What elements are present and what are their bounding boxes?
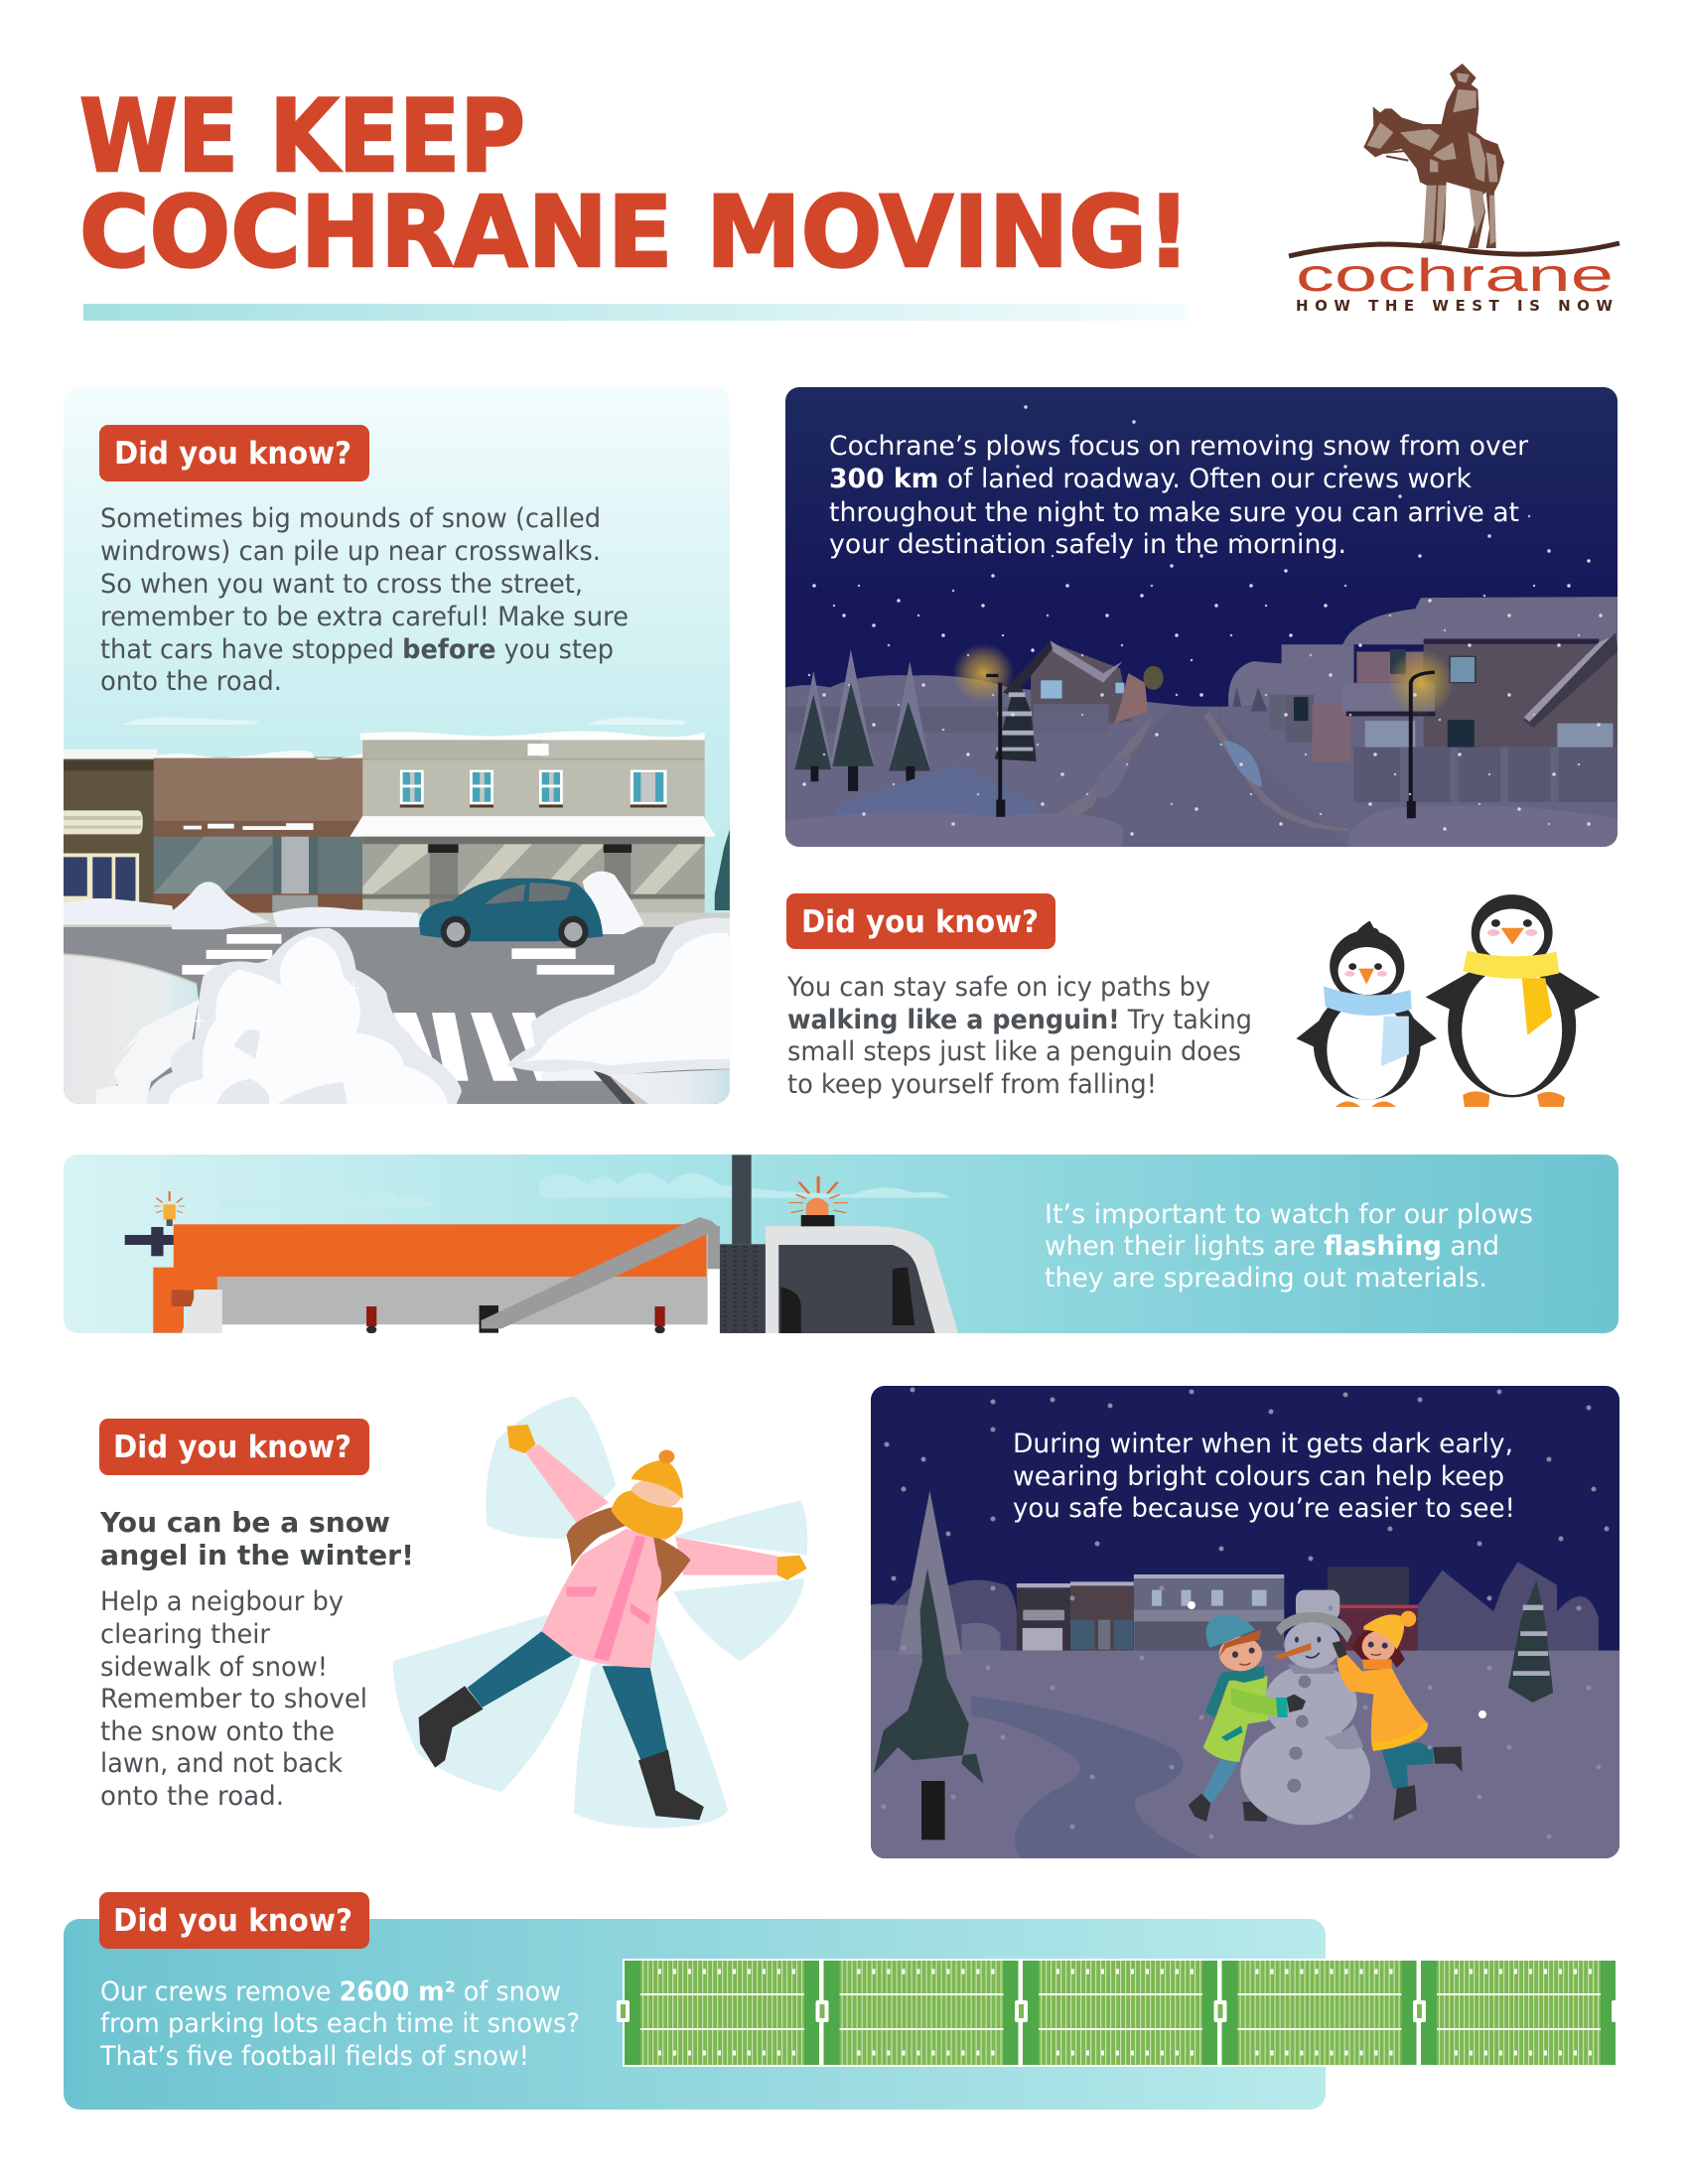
body text: It’s important to watch for our plows — [1045, 1199, 1533, 1230]
small penguin — [1297, 921, 1437, 1107]
illustration: kids building a snowman — [870, 1390, 1619, 1859]
boy legs and boots — [1203, 1760, 1238, 1804]
road — [971, 1696, 1200, 1858]
logo: Cochrane rider and wordmark — [1289, 64, 1619, 315]
body text: onto the road. — [100, 1781, 284, 1812]
body text: to keep yourself from falling! — [787, 1069, 1157, 1100]
trees — [794, 671, 833, 768]
boy sleeve, mitten, scarf, head — [1231, 1688, 1278, 1715]
body text: During winter when it gets dark early, — [1013, 1429, 1513, 1459]
body text: clearing their — [100, 1619, 270, 1650]
big penguin — [1426, 894, 1600, 1107]
title: WE KEEP — [79, 77, 525, 195]
heading — [99, 1506, 414, 1571]
body text: Sometimes big mounds of snow (called — [100, 503, 601, 534]
snow mounds — [64, 917, 739, 1104]
girl — [1333, 1611, 1463, 1821]
body text: windrows) can pile up near crosswalks. — [100, 536, 601, 567]
body text: Cochrane’s plows focus on removing snow from over — [829, 431, 1528, 462]
car — [419, 879, 603, 947]
right tree — [1508, 1580, 1553, 1703]
illustration: snowy neighbourhood at night — [785, 407, 1618, 848]
body text: the snow onto the — [100, 1716, 335, 1747]
left hair — [567, 1507, 626, 1567]
arms — [524, 1444, 778, 1575]
kids and snowman — [1189, 1590, 1463, 1825]
panel: windrows at crosswalks — [64, 387, 739, 1106]
body text: that cars have stopped before you step — [100, 634, 614, 665]
body text — [786, 972, 1252, 1100]
panel: walk like a penguin — [786, 893, 1600, 1107]
title: COCHRANE MOVING! — [79, 176, 1191, 290]
body text — [100, 1586, 367, 1812]
panel background — [64, 1155, 1618, 1333]
boy coat — [1203, 1676, 1269, 1762]
swoosh — [1289, 243, 1619, 256]
body text: you safe because you’re easier to see! — [1013, 1493, 1515, 1524]
body text: remember to be extra careful! Make sure — [100, 602, 629, 632]
body text — [829, 431, 1528, 560]
panel background — [64, 1919, 1326, 2110]
panel: night plowing — [785, 387, 1618, 848]
head, scarf and hat — [630, 1478, 681, 1510]
badge: Did you know? — [113, 1430, 352, 1465]
ground — [870, 1651, 1619, 1859]
body text: they are spreading out materials. — [1045, 1263, 1487, 1294]
title — [79, 77, 1191, 290]
body text: 300 km of laned roadway. Often our crews work — [829, 464, 1473, 494]
badge — [99, 1419, 369, 1475]
body text: from parking lots each time it snows? — [100, 2008, 580, 2039]
background tree line — [870, 1562, 1599, 1651]
body text: onto the road. — [100, 666, 282, 697]
right hair — [653, 1536, 690, 1601]
legs — [468, 1631, 668, 1760]
badge — [99, 425, 369, 481]
body text: wearing bright colours can help keep — [1013, 1461, 1504, 1492]
road — [1192, 707, 1220, 847]
shops — [1017, 1585, 1070, 1651]
heading: angel in the winter! — [100, 1539, 414, 1571]
body text: your destination safely in the morning. — [829, 529, 1346, 560]
street lamps — [954, 645, 1013, 701]
badge: Did you know? — [113, 1903, 352, 1939]
body text: Help a neigbour by — [100, 1586, 344, 1617]
snow angel imprint — [393, 1397, 807, 1829]
left tree — [898, 1491, 961, 1655]
coat — [542, 1529, 665, 1668]
body text: Remember to shovel — [100, 1684, 367, 1714]
body text — [1045, 1199, 1533, 1294]
heading: You can be a snow — [99, 1506, 390, 1539]
right houses — [1228, 644, 1354, 707]
body text: when their lights are flashing and — [1045, 1231, 1499, 1262]
badge: Did you know? — [801, 904, 1039, 940]
panel: five football fields — [64, 1892, 1621, 2110]
body text — [100, 503, 629, 697]
body text: So when you want to cross the street, — [100, 569, 583, 600]
panel: watch for plows — [64, 1155, 1618, 1333]
body text: You can stay safe on icy paths by — [786, 972, 1210, 1003]
body text: That’s five football fields of snow! — [99, 2041, 529, 2072]
panel background — [871, 1386, 1619, 1858]
falling snow — [804, 407, 1601, 834]
body text: small steps just like a penguin does — [787, 1036, 1241, 1067]
body text — [1013, 1429, 1515, 1524]
body text — [99, 1977, 580, 2072]
falling snow — [884, 1390, 1607, 1837]
panel: snow angel — [99, 1397, 807, 1829]
wordmark: cochrane — [1296, 249, 1614, 301]
badge — [786, 893, 1055, 949]
body text: sidewalk of snow! — [100, 1652, 328, 1683]
illustration: girl making a snow angel — [393, 1397, 807, 1829]
tagline: HOW THE WEST IS NOW — [1296, 297, 1613, 315]
icon: two penguins with scarves — [1297, 894, 1600, 1107]
panel background — [785, 387, 1618, 847]
icon: horse and rider — [1363, 64, 1504, 248]
panel background — [64, 387, 730, 1104]
body text: Our crews remove 2600 m² of snow — [100, 1977, 561, 2007]
boots — [419, 1686, 704, 1820]
body text: throughout the night to make sure you can arrive at — [829, 497, 1519, 528]
badge: Did you know? — [114, 436, 352, 472]
title underline bar — [83, 304, 1188, 321]
sidewalk snowbanks — [64, 882, 418, 929]
badge — [99, 1892, 369, 1949]
mittens — [507, 1425, 807, 1580]
body text: walking like a penguin! Try taking — [787, 1005, 1252, 1035]
illustration: snowy street and car — [64, 718, 739, 1106]
illustration: snow plow truck — [125, 1155, 958, 1333]
chart: five football fields in a row — [617, 1959, 1621, 2067]
body text: lawn, and not back — [100, 1748, 344, 1779]
snowman — [1240, 1590, 1370, 1825]
panel: bright colours at night — [870, 1386, 1619, 1859]
